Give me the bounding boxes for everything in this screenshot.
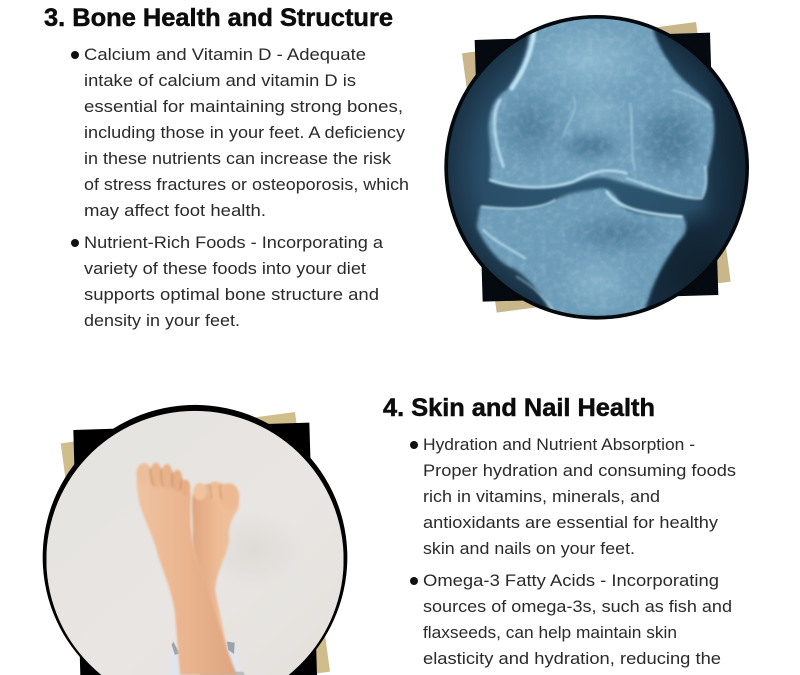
bullet: hydration and nutrient absorption: skin and nails on your feet. [423, 540, 635, 558]
bullet: calcium and vitamin D [71, 46, 409, 220]
bullet: omega-3 fatty acids: Omega-3 Fatty Acids - Incorporating [423, 572, 719, 590]
section 4: skin and nail health [43, 394, 736, 675]
bullet: hydration and nutrient absorption: rich in vitamins, minerals, and [423, 488, 660, 506]
heading: 4. Skin and Nail Health: 4. Skin and Nail Health [383, 394, 655, 422]
jeans cuff [168, 643, 243, 675]
bullet: omega-3 fatty acids: flaxseeds, can help maintain skin [423, 624, 677, 642]
image: knee x-ray in circle [444, 15, 749, 320]
bullet: calcium and vitamin D: intake of calcium and vitamin D is [84, 72, 356, 90]
bullet: hydration and nutrient absorption [410, 436, 736, 558]
bullet: calcium and vitamin D: Calcium and Vitamin D - Adequate [84, 46, 366, 64]
heading: 3. Bone Health and Structure: 3. Bone Health and Structure [44, 4, 393, 32]
image: crossed feet in circle [43, 405, 347, 675]
left foot and leg [136, 463, 237, 675]
bullet: calcium and vitamin D: may affect foot health. [84, 202, 266, 220]
bullet: nutrient-rich foods: density in your feet. [84, 312, 240, 330]
bullet: nutrient-rich foods: variety of these foods into your diet [84, 260, 366, 278]
bullet: calcium and vitamin D: essential for maintaining strong bones, [84, 98, 403, 116]
bullet: calcium and vitamin D: in these nutrients can increase the risk [84, 150, 392, 168]
bullet: omega-3 fatty acids [410, 572, 732, 668]
bullet: nutrient-rich foods: supports optimal bone structure and [84, 286, 379, 304]
bullet: calcium and vitamin D: of stress fractures or osteoporosis, which [84, 176, 409, 194]
bullet: hydration and nutrient absorption: Hydration and Nutrient Absorption - [423, 436, 695, 454]
bullet: hydration and nutrient absorption: antioxidants are essential for healthy [423, 514, 719, 532]
bullet: hydration and nutrient absorption: Proper hydration and consuming foods [423, 462, 736, 480]
bullet: calcium and vitamin D: including those in your feet. A deficiency [84, 124, 406, 142]
bullet: omega-3 fatty acids: elasticity and hydration, reducing the [423, 650, 721, 668]
right foot [192, 481, 239, 647]
bullet: omega-3 fatty acids: sources of omega-3s, such as fish and [423, 598, 732, 616]
bullet: nutrient-rich foods [71, 234, 384, 330]
section 3: bone health and structure [44, 4, 783, 340]
bullet: nutrient-rich foods: Nutrient-Rich Foods - Incorporating a [84, 234, 384, 252]
